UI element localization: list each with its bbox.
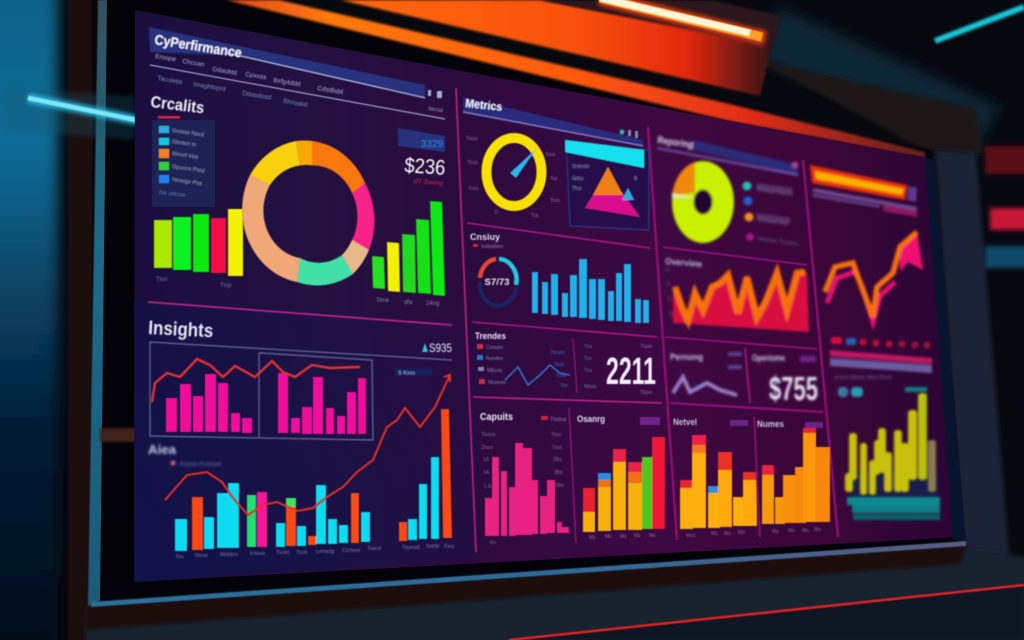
divider: overview row [663,247,807,265]
heading bar: Metrics [463,96,643,147]
panel: reporting header: Reporing [657,135,694,151]
panel: reporting header [657,135,798,175]
donut legend [742,182,799,248]
lower chart axis labels [175,544,455,560]
heading: Circuits: Crcalits [150,92,205,118]
bar chart: right green bars [372,201,445,307]
KPI: S935: S935 [429,341,452,355]
gauge: Tsss [550,198,560,204]
navigation rows: Chcuan [182,58,205,69]
KPI: $755: Operiome [752,353,785,363]
navigation rows: Eroope [155,53,177,63]
panel: overview area chart [665,256,809,332]
legend panel: Grosse Nocd [172,128,204,138]
panel: trends: Tsso [556,373,566,379]
KPI: $755 [752,353,818,407]
dashboard panel [134,10,963,582]
KPI: $236: sf7 Zowng [413,178,444,187]
KPI: 2211 [584,344,656,396]
legend panel: Gpuons Prod [172,164,205,174]
lower chart axis labels: Cichest [342,548,361,554]
panel: trends: Cnsues [486,345,503,351]
insights chart frame [150,342,452,440]
panel: capuits pink bars: Capuits [480,412,513,423]
panel: trends [475,331,577,393]
panel: capuits pink bars: 1A [483,457,490,463]
bar chart: left green bars: Tion [156,277,167,283]
KPI: $236: 3329 [421,139,443,150]
screen right edge strip [925,158,966,541]
panel: gold bars right: Mo [788,528,795,534]
panel: stacked bars: Ms [649,533,656,539]
lower red trend line with arrow [165,375,450,515]
bar chart: left green bars: Tlop [220,283,232,289]
navigation rows [155,53,344,109]
panel: stacked bars: Ms [620,534,627,540]
bar chart: left green bars [154,209,243,289]
KPI: 2211: 2211 [606,351,656,393]
panel: trends: Tsn [560,383,568,389]
navigation rows: Imaghtoprd [193,81,227,93]
legend panel [152,116,215,207]
panel: gold bars right: Mo [802,528,809,534]
panel: trends: Nsuos [551,350,566,356]
legend panel: Bincel Iroa [172,151,199,161]
panel: gold bars left: Mo [724,531,731,537]
panel: gold bars right: Numes [757,419,784,429]
bar chart: right green bars: Time [376,298,390,304]
header icons: Nsrod [428,106,443,114]
divider: gauge row [467,223,650,248]
lower chart axis labels: Nlour [195,553,208,559]
yellow chart shadow [850,470,938,498]
navigation rows: Tacuiess [157,75,184,86]
panel: capuits pink bars: 3Bs [555,483,564,489]
lower floor red line [509,585,1024,640]
panel: overview area chart: Tl [665,268,669,274]
navigation rows: Cdsdbdd [317,85,344,96]
panel: stacked bars: Ms [589,535,596,541]
panel: pyramid chart: Gdss [572,176,584,182]
KPI: 2211: Nloss [584,384,597,390]
panel: gold bars left: Mos [686,533,696,539]
screen black surround [100,0,965,600]
KPI: 2211: Tos [584,356,592,362]
donut chart [242,140,374,286]
teal wall lamp [935,7,1024,41]
legend panel: Nix orbcoe [159,190,186,199]
panel: capuits pink bars: Zlsos [481,445,493,451]
navigation rows: Cpxxss [245,71,268,81]
header bar: Cyperformance: CyPerfirmance [154,31,243,61]
lower chart axis labels: Tsold [276,550,289,556]
divider: column one [456,88,476,552]
gauge [466,136,560,219]
heading: Cnsiuy: Cnsiuy [470,232,500,242]
KPI: 2211: Tlson [640,390,652,396]
panel: capuits pink bars: 3Bs [554,470,563,476]
gauge: Tra [531,213,539,219]
lower chart axis labels: Inblue [250,551,265,557]
status bars: Iroms Mloss Tilon Roso [835,375,892,381]
panel: stacked bars [577,414,665,541]
donut legend: Ondus Hssos [757,187,793,198]
panel: trends: Nuodes [486,356,504,362]
divider: KPI row [665,337,817,349]
KPI: 2211: Tlson [640,344,652,350]
gauge: Tlsss [466,136,478,142]
status dots row [831,337,930,348]
bottom bezel line [91,541,966,607]
panel: capuits pink bars: Gv [490,540,497,546]
lower chart axis labels: Tayead [402,545,420,551]
panel: gold bars right [757,419,830,535]
panel: overview area chart: Tl [667,297,671,303]
lower mixed bar chart [175,409,452,551]
panel: capuits pink bars: Tsos [552,445,563,451]
divider: KPI cell [745,348,750,403]
header bar: Cyperformance [149,27,445,119]
panel: capuits pink bars: Tsos [551,432,562,438]
heading: Area: Aiea [148,442,177,457]
heat bar [810,165,917,202]
panel: stacked bars: Ms [634,533,641,539]
bar chart: right green bars: dfa [404,300,413,306]
heading: Insights: Insights [148,318,214,342]
navigation rows: Ddasdosd [242,90,272,102]
lower chart axis labels: Twest [367,546,382,552]
divider: column two [648,127,677,540]
panel: overview area chart: Tl [668,312,672,318]
lower chart axis labels: Lehadg [316,549,334,555]
small ring gauge: S7/73 [484,277,510,288]
panel: capuits pink bars [480,408,576,546]
tag label: S Kxss [398,370,415,376]
lower chart axis labels: Midden [220,552,238,558]
panel: peroxing wave: Pernong [670,352,703,362]
navigation rows: Gdaobtd [212,66,238,77]
gauge: Thss [467,160,478,166]
divider: gold charts [754,417,760,537]
navigation rows: Ibrfg4ddd [273,77,301,88]
tag label [395,368,432,376]
legend panel: Gbrace m [172,139,197,148]
divider: charts row [473,397,662,403]
panel: trends: Mllisos [487,368,503,374]
right area line chart [825,232,923,322]
panel: overview area chart: Overview [665,256,703,269]
divider: trends row [472,322,657,337]
lower chart axis labels: Tsoll [296,550,307,556]
overhead lamp [600,0,765,38]
panel: pyramid chart: B [634,176,638,182]
gauge: Tsss [545,152,556,158]
navigation rows: Rhroskd [283,98,308,109]
panel: gold bars left: Mo [738,530,745,536]
status bars [830,350,932,397]
panel: pyramid chart: Onbeds [572,164,590,170]
panel navy tint [134,300,480,582]
panel: gold bars left: Mo [711,531,718,537]
red reflection [100,428,136,442]
purple sub bars [813,188,917,217]
lower chart axis labels: Tou [175,554,184,560]
panel: pyramid chart: Tfss [572,186,582,192]
blue bar chart [532,259,649,323]
monitor bezel left edge [88,0,108,606]
area legend: Kision Fumset [180,461,221,468]
KPI: 2211: Tos [584,344,592,350]
divider: column three [803,160,838,537]
KPI: $236 [398,128,446,187]
panel: capuits pink bars: 1 A [484,484,492,490]
panel: peroxing wave [670,352,742,395]
header icons [428,90,443,114]
insights red trend line [152,359,360,402]
panel: overview area chart: Tl [666,282,670,288]
gauge: Tl [494,210,498,216]
panel: trends: Nluonss [488,380,507,386]
panel: capuits pink bars: Tlssos [481,432,496,438]
panel: trends: Tsos [554,362,565,368]
panel: gold bars right: Mo [814,527,821,533]
upper orange light band [340,0,773,96]
pink bar charts [166,373,366,434]
panel: stacked bars: Ms [605,534,612,540]
cyan light bar [5,88,146,140]
bar chart: right green bars: 24ug [426,301,439,307]
small ring gauge [480,259,517,306]
panel: gold bars right: Mo [772,529,779,535]
heading bar: Metrics: Metrics [465,96,503,114]
panel: gold bars left: Netvel [673,417,697,427]
lower chart axis labels: 5WW [426,544,440,550]
panel: capuits pink bars: Thstos [550,417,567,423]
panel: trends: Trendes [475,331,506,341]
donut legend: Desues Ino [757,217,788,227]
donut chart: lime [672,161,734,243]
panel: gold bars left [673,417,757,539]
KPI: S935 [422,341,452,355]
lower chart axis labels: Flex [444,544,455,550]
panel: stacked bars: Osanrg [577,414,605,424]
KPI: $236: $236 [404,154,446,180]
KPI: $755: $755 [769,370,818,407]
divider: left section [148,302,452,325]
lower orange light band [226,0,925,158]
panel: capuits pink bars: 1A [483,470,490,476]
panel: pyramid chart [565,140,649,230]
KPI: 2211: Tos [584,368,592,374]
gauge: Tnss [468,186,479,192]
donut legend: Nosses Tosslos [757,236,799,248]
small marker legend: Indisdiess [481,244,504,250]
teal base bands [847,497,940,520]
panel: yellow bar chart [845,393,936,495]
legend panel: Neasge Psa [172,177,203,187]
divider: lower row [670,403,823,412]
overhead lamp housing [541,0,778,46]
panel: capuits pink bars: 3Bs [553,457,562,463]
gauge: Tss [550,176,558,182]
